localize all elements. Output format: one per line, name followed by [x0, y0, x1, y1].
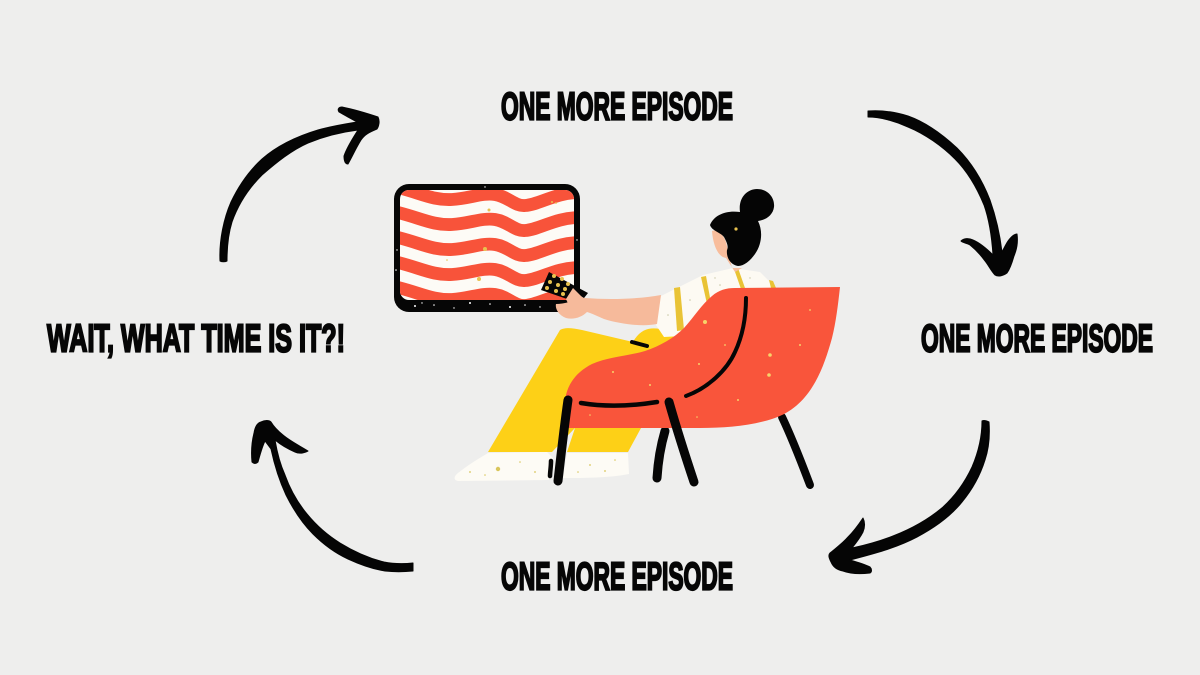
shoe: near — [455, 452, 553, 481]
pocket mark — [632, 342, 647, 346]
hand thumb — [566, 288, 587, 310]
woman: neck and face — [712, 231, 742, 272]
woman: shirt straps — [674, 268, 776, 331]
armchair — [565, 287, 840, 428]
label: bottom, one more episode: ONE MORE EPISODE — [501, 556, 733, 598]
illustration: person watching TV — [394, 184, 840, 485]
armchair seam lines — [581, 298, 746, 406]
tv — [394, 184, 580, 312]
arrow: bottom to left — [252, 420, 413, 572]
arrow: right to bottom — [829, 421, 989, 574]
arrow: left to top — [220, 107, 379, 262]
label: top, one more episode: ONE MORE EPISODE — [501, 86, 733, 128]
label: left, wait what time is it: WAIT, WHAT TIME IS IT?! — [47, 318, 345, 360]
woman: shirt — [656, 268, 775, 337]
front chair legs — [550, 400, 694, 482]
arrow: top to right — [868, 111, 1017, 276]
remote control — [541, 272, 588, 299]
chair speckles — [589, 309, 811, 418]
shoe: far — [563, 453, 629, 478]
woman: pants — [488, 328, 685, 452]
tv wavy stripes — [400, 190, 574, 300]
woman: arm and hand — [556, 295, 661, 325]
shoe speckles — [469, 459, 616, 476]
back chair leg — [782, 417, 810, 485]
shirt speckles — [667, 277, 751, 319]
woman: hair — [710, 189, 774, 266]
far chair leg — [657, 431, 665, 478]
infographic canvas — [46, 91, 1153, 592]
